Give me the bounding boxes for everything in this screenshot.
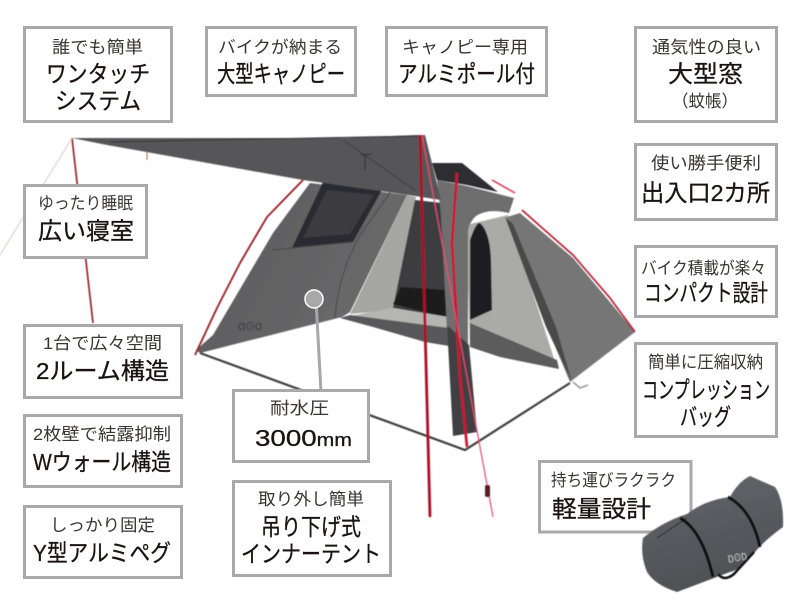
bag logo: D⊙D	[727, 552, 748, 566]
wall seam	[272, 190, 392, 318]
callout: two-room structure: 2ルーム構造	[36, 358, 169, 384]
callout: two entrances	[636, 144, 776, 220]
light floor strip	[350, 308, 449, 330]
water pressure pointer	[305, 290, 323, 392]
roof	[432, 163, 498, 192]
side opening	[470, 223, 492, 320]
bag straps	[680, 497, 760, 578]
tent peg	[573, 382, 588, 388]
carry bag	[642, 476, 783, 592]
callout: two-room structure	[24, 326, 182, 398]
callout: large canopy: 大型キャノピー	[217, 61, 345, 87]
canopy main pole	[420, 135, 430, 517]
callout: compact design: バイク積載が楽々	[641, 259, 766, 278]
callout: Y-shaped peg: しっかり固定	[50, 516, 155, 535]
callout: hanging inner tent: 取り外し簡単	[258, 490, 364, 509]
callout: spacious bedroom: ゆったり睡眠	[38, 194, 133, 213]
guy line tensioner	[485, 485, 490, 497]
tent illustration	[0, 135, 635, 517]
callout: two-room structure: 1台で広々空間	[43, 334, 162, 353]
callout: one-touch system: 誰でも簡単	[52, 38, 143, 57]
callout: aluminium pole: アルミポール付	[398, 61, 535, 87]
top guy line	[492, 180, 515, 193]
callout: large canopy	[206, 28, 356, 96]
side pole	[452, 173, 467, 447]
bag zipper	[657, 518, 687, 538]
hanging door flap	[447, 325, 477, 436]
callout: aluminium pole: キャノピー専用	[402, 38, 528, 57]
callout: compression bag	[636, 344, 776, 436]
ground sheet lines	[200, 353, 570, 450]
callout: double wall	[24, 416, 182, 486]
callout: lightweight design: 持ち運びラクラク	[551, 471, 676, 490]
callout: Y-shaped peg: Y型アルミペグ	[33, 540, 171, 566]
callout: one-touch system: システム	[55, 88, 141, 114]
callout: hanging inner tent	[234, 482, 390, 576]
light inner door panel	[350, 195, 416, 314]
right inner wall	[466, 215, 557, 368]
right tent pole	[522, 210, 635, 332]
callout: compression bag: 簡単に圧縮収納	[648, 353, 763, 372]
callout: large window: （蚊帳）	[672, 92, 738, 111]
dark entrance interior	[393, 200, 452, 318]
callout: one-touch system	[24, 28, 172, 122]
callout: hanging inner tent: 吊り下げ式	[261, 514, 361, 540]
pink guy line	[422, 135, 493, 517]
callout: spacious bedroom: 広い寝室	[38, 218, 134, 244]
callout: lightweight design	[540, 462, 691, 532]
canopy seam	[343, 140, 415, 190]
callout: double wall: 2枚壁で結露抑制	[33, 425, 171, 444]
canopy tarp	[72, 135, 441, 200]
callout: one-touch system: ワンタッチ	[46, 61, 150, 87]
entrance dark floor	[393, 287, 449, 318]
callout: water pressure: 3000 mm	[255, 425, 352, 451]
callout: compact design	[636, 246, 776, 316]
callout: water pressure: 耐水圧	[270, 399, 329, 418]
hanging peg	[146, 152, 148, 160]
callout: double wall: Wウォール構造	[33, 449, 171, 475]
callout: hanging inner tent: インナーテント	[241, 541, 381, 567]
window mesh	[303, 190, 374, 238]
canopy top edge	[110, 136, 418, 142]
right panel dark seam	[505, 217, 572, 382]
callout: large canopy: バイクが納まる	[218, 38, 342, 57]
callout: compression bag: バッグ	[680, 404, 731, 430]
right skirt	[470, 323, 559, 369]
callout: two entrances: 使い勝手便利	[651, 153, 761, 173]
front skirt	[340, 315, 449, 346]
mirrored logo on wall: D⊙D	[238, 322, 262, 333]
canopy strut	[361, 154, 372, 170]
callout: Y-shaped peg	[24, 506, 182, 578]
left tent pole	[195, 180, 303, 355]
left guy lines	[0, 138, 93, 323]
callout: two entrances: 出入口2カ所	[641, 180, 770, 206]
callout: spacious bedroom	[24, 186, 146, 258]
callout: water pressure	[234, 390, 368, 462]
side window	[292, 182, 383, 248]
callout: large window	[636, 28, 776, 122]
right outer panel	[507, 213, 635, 382]
callout: large window: 通気性の良い	[652, 38, 761, 57]
front column	[437, 180, 514, 347]
callout: aluminium pole	[386, 28, 546, 96]
bag body	[642, 476, 783, 592]
callout: lightweight design: 軽量設計	[552, 496, 651, 522]
callout: large window: 大型窓	[668, 61, 743, 87]
main left tent wall	[196, 183, 407, 353]
